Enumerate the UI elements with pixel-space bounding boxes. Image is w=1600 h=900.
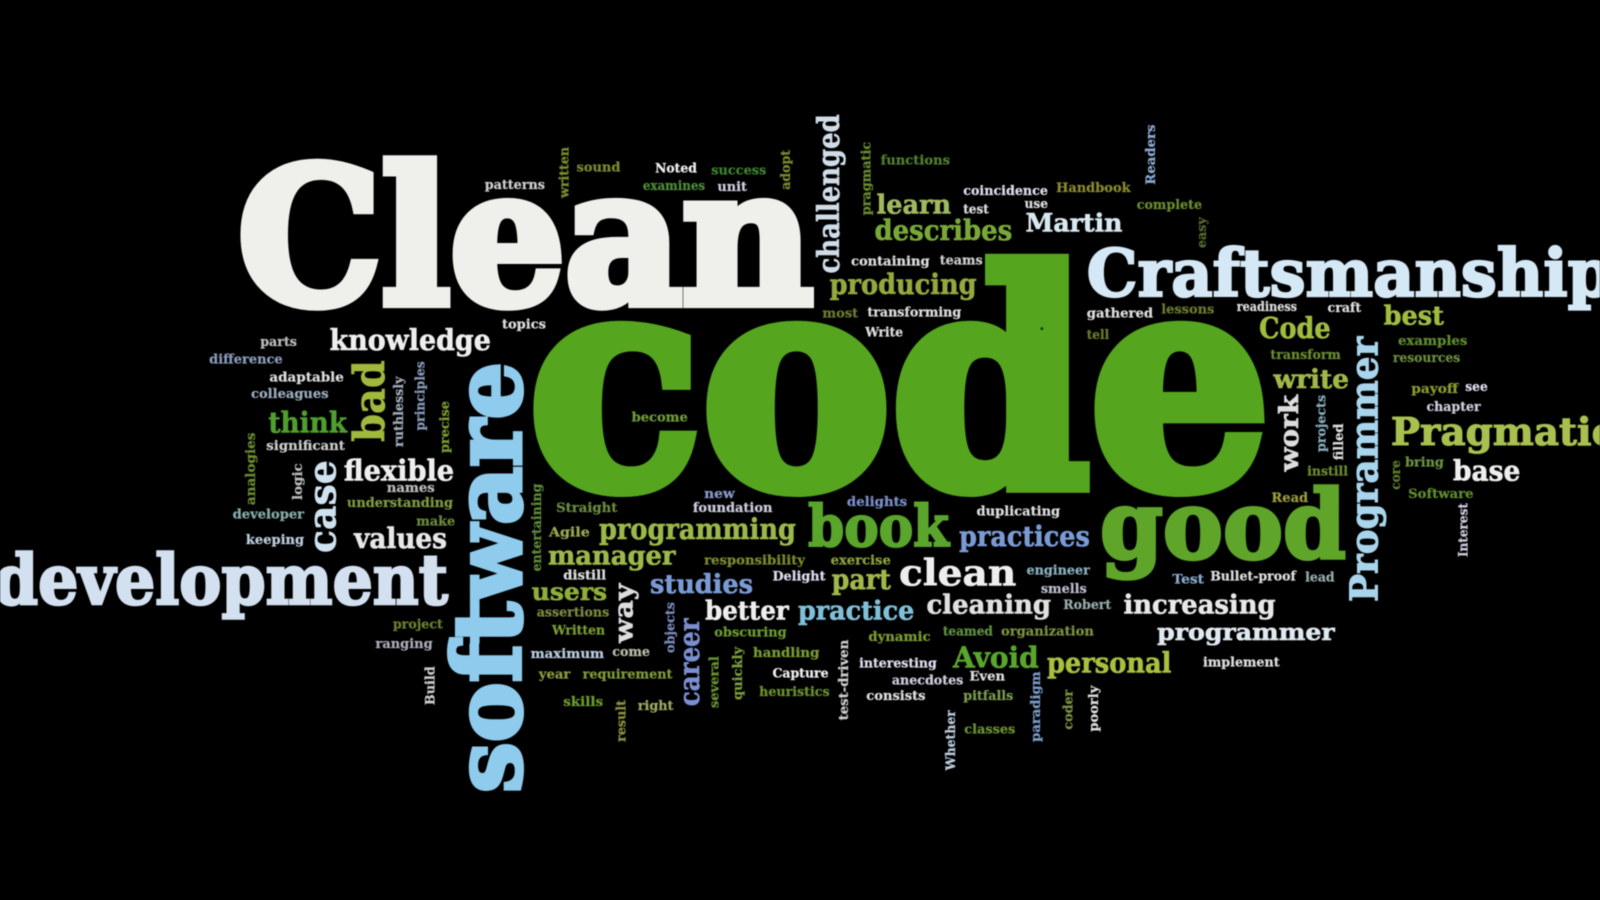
small words: right cluster: Interest <box>1456 503 1471 557</box>
small words: left cluster: colleagues <box>251 387 329 402</box>
small words: top cluster: patterns <box>485 178 545 193</box>
small words: top cluster: written <box>557 147 572 199</box>
small words: lower centre cluster: result <box>615 700 630 742</box>
small words: left cluster: parts <box>260 335 297 350</box>
small words: left cluster: developer <box>233 507 304 522</box>
word: programmer: programmer <box>1157 618 1335 646</box>
small words: top cluster: containing <box>851 254 930 269</box>
speck inside the d of code <box>1041 327 1043 330</box>
word: flexible: flexible <box>344 454 454 488</box>
word: Code: Code <box>1259 311 1331 345</box>
small words: top cluster: Readers <box>1144 124 1159 185</box>
small words: left cluster: analogies <box>244 433 259 505</box>
small words: top cluster: Handbook <box>1056 181 1132 196</box>
word: increasing: increasing <box>1123 589 1276 620</box>
small words: lower centre cluster: new <box>704 487 736 502</box>
small words: left cluster: understanding <box>347 496 453 511</box>
word: Martin: Martin <box>1026 209 1122 239</box>
small words: lower centre cluster: test-driven <box>837 640 852 720</box>
word: knowledge: knowledge <box>330 323 491 357</box>
small words: right cluster: filled <box>1332 423 1347 460</box>
word: good: good <box>1100 470 1346 581</box>
word: describes: describes <box>874 215 1012 247</box>
small words: left cluster: ranging <box>376 637 433 652</box>
small words: lower centre cluster: come <box>612 645 650 660</box>
word: best: best <box>1384 300 1445 331</box>
word: Programmer: Programmer <box>1343 336 1388 602</box>
small words: lower centre cluster: quickly <box>731 646 746 700</box>
small words: top cluster: complete <box>1137 198 1202 213</box>
small words: lower centre cluster: smells <box>1041 582 1087 597</box>
word: development: development <box>0 540 448 621</box>
small words: lower centre cluster: consists <box>866 689 926 704</box>
small words: left cluster: Build <box>424 666 439 705</box>
word: clean: clean <box>899 552 1016 595</box>
small words: lower centre cluster: paradigm <box>1029 671 1044 742</box>
small words: top cluster: Noted <box>655 161 697 176</box>
word: programming: programming <box>599 512 796 546</box>
word: manager: manager <box>548 540 677 571</box>
small words: lower centre cluster: Whether <box>944 710 959 771</box>
small words: left cluster <box>209 318 546 705</box>
small words: right cluster: craft <box>1328 301 1361 316</box>
small words: lower centre cluster: distill <box>563 569 606 584</box>
word: bad: bad <box>346 360 396 442</box>
small words: right cluster: core <box>1389 460 1404 490</box>
word: code: code <box>529 208 1270 556</box>
small words: top cluster: examines <box>643 179 705 194</box>
small words: right cluster: chapter <box>1427 400 1481 415</box>
small words: lower centre cluster: coder <box>1061 690 1076 730</box>
small words: lower centre cluster: Robert <box>1063 598 1111 613</box>
small words: right cluster: payoff <box>1411 382 1460 397</box>
word: studies: studies <box>650 569 753 600</box>
small words: lower centre cluster: heuristics <box>759 685 830 700</box>
small words: lower centre cluster: classes <box>964 723 1015 738</box>
small words: right cluster <box>1087 300 1488 557</box>
small words: right cluster: Software <box>1408 487 1473 502</box>
small words: right cluster: readiness <box>1237 300 1297 315</box>
small words: right cluster: gathered <box>1087 306 1153 321</box>
small words: lower centre cluster: year <box>538 668 571 683</box>
small words: left cluster: precise <box>438 401 453 453</box>
small words: lower centre cluster: responsibility <box>704 553 806 568</box>
small words: right cluster: resources <box>1393 351 1460 366</box>
small words: lower centre cluster <box>530 410 1335 771</box>
small words: top cluster: Write <box>864 326 903 341</box>
small words: lower centre cluster: poorly <box>1087 685 1102 732</box>
small words: lower centre cluster: entertaining <box>530 484 545 571</box>
small words: left cluster: significant <box>266 439 345 454</box>
small words: right cluster: lessons <box>1161 302 1214 317</box>
small words: top cluster <box>485 124 1210 341</box>
small words: left cluster: ruthlessly <box>392 376 407 447</box>
small words: top cluster: adopt <box>779 150 794 190</box>
small words: lower centre cluster: maximum <box>531 647 605 662</box>
small words: lower centre cluster: Straight <box>556 501 617 516</box>
small words: lower centre cluster: engineer <box>1027 563 1090 578</box>
word: learn: learn <box>877 189 951 220</box>
small words: right cluster: instill <box>1307 465 1348 480</box>
small words: lower centre cluster: foundation <box>693 501 772 516</box>
word: implement: implement <box>1203 655 1280 670</box>
small words: lower centre cluster: interesting <box>859 656 937 671</box>
small words: lower centre cluster: requirement <box>583 668 673 683</box>
small words: lower centre cluster: several <box>707 656 722 708</box>
word: software: software <box>433 362 543 793</box>
small words: lower centre cluster: objects <box>663 602 678 653</box>
small words: top cluster: functions <box>881 153 950 168</box>
word: practice: practice <box>798 595 914 626</box>
small words: top cluster: transforming <box>867 305 961 320</box>
word: producing: producing <box>830 269 977 301</box>
small words: left cluster: names <box>387 481 435 496</box>
small words: right cluster: projects <box>1315 395 1330 452</box>
small words: left cluster: topics <box>502 318 546 333</box>
word: way: way <box>609 582 640 644</box>
small words: lower centre cluster: skills <box>563 695 603 710</box>
small words: lower centre cluster: Written <box>551 624 605 639</box>
word: book: book <box>808 493 950 560</box>
small words: top cluster: pragmatic <box>859 142 874 215</box>
small words: lower centre cluster: duplicating <box>977 504 1060 519</box>
small words: top cluster: test <box>963 202 989 217</box>
small words: lower centre cluster: obscuring <box>714 626 787 641</box>
small words: lower centre cluster: Bullet-proof <box>1210 570 1297 585</box>
small words: top cluster: success <box>711 163 766 178</box>
small words: left cluster: project <box>393 618 443 633</box>
small words: right cluster: Read <box>1271 491 1308 506</box>
word: Clean: Clean <box>238 128 813 348</box>
word: values: values <box>353 523 447 555</box>
small words: top cluster: teams <box>940 253 983 268</box>
word: challenged: challenged <box>811 114 846 273</box>
word: Avoid: Avoid <box>952 640 1039 674</box>
word: work: work <box>1274 394 1305 472</box>
word: cleaning: cleaning <box>927 589 1051 620</box>
small words: lower centre cluster: Capture <box>772 667 829 682</box>
word: personal: personal <box>1047 647 1171 679</box>
small words: right cluster: transform <box>1270 348 1341 363</box>
small words: lower centre cluster: Test <box>1172 573 1204 588</box>
word: career: career <box>674 618 706 706</box>
small words: top cluster: use <box>1024 197 1048 212</box>
word: users: users <box>532 577 607 606</box>
word: write: write <box>1272 364 1349 395</box>
small words: top cluster: coincidence <box>963 184 1048 199</box>
small words: left cluster: make <box>416 515 455 530</box>
small words: top cluster: unit <box>717 180 747 195</box>
small words: lower centre cluster: assertions <box>537 605 609 620</box>
small words: top cluster: sound <box>577 160 620 175</box>
small words: left cluster: keeping <box>246 533 304 548</box>
small words: lower centre cluster: delights <box>847 495 907 510</box>
small words: lower centre cluster: exercise <box>831 553 891 568</box>
small words: right cluster: see <box>1465 380 1488 395</box>
word: practices: practices <box>959 521 1090 553</box>
small words: lower centre cluster: Delight <box>772 570 826 585</box>
small words: right cluster: tell <box>1087 328 1109 343</box>
word: base: base <box>1453 456 1520 488</box>
small words: lower centre cluster: lead <box>1305 571 1335 586</box>
word: better: better <box>705 595 790 626</box>
small words: right cluster: examples <box>1398 334 1467 349</box>
small words: lower centre cluster: become <box>632 410 688 425</box>
small words: left cluster: adaptable <box>269 371 344 386</box>
small words: lower centre cluster: Agile <box>548 526 590 541</box>
small words: lower centre cluster: right <box>638 699 674 714</box>
small words: lower centre cluster: teamed <box>943 625 993 640</box>
small words: lower centre cluster: organization <box>1001 625 1094 640</box>
small words: left cluster: difference <box>209 352 283 367</box>
small words: left cluster: principles <box>413 361 428 431</box>
word: part: part <box>832 564 891 596</box>
small words: left cluster: logic <box>291 463 306 500</box>
small words: right cluster: bring <box>1405 455 1444 470</box>
small words: lower centre cluster: Even <box>969 670 1005 685</box>
small words: lower centre cluster: pitfalls <box>963 689 1013 704</box>
word: think: think <box>268 406 348 440</box>
word: case: case <box>301 460 346 553</box>
small words: lower centre cluster: handling <box>753 646 819 661</box>
small words: lower centre cluster: anecdotes <box>892 674 963 689</box>
small words: lower centre cluster: dynamic <box>868 630 931 645</box>
small words: top cluster: easy <box>1195 217 1210 248</box>
small words: top cluster: most <box>822 306 858 321</box>
